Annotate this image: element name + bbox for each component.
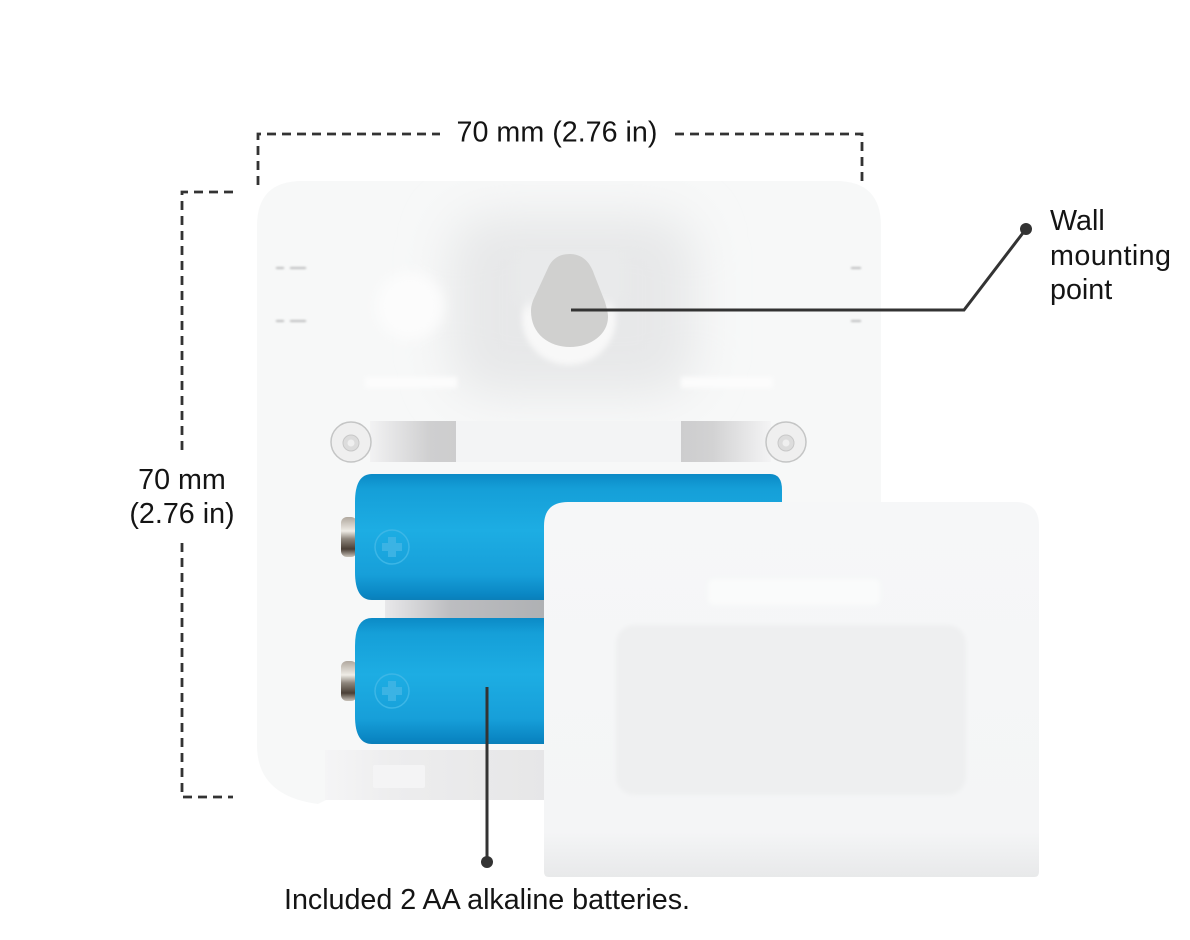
clip marks — [276, 268, 861, 321]
icon: screw left — [331, 422, 371, 462]
wall mount leader line — [571, 223, 1032, 310]
icon: screw right — [766, 422, 806, 462]
wall mount label: point — [1050, 274, 1112, 306]
strip left — [370, 421, 456, 462]
battery cover — [544, 502, 1039, 877]
cover label recess — [616, 625, 966, 795]
recessed shading around mount — [450, 215, 695, 395]
battery bottom — [341, 618, 550, 744]
icon: plus mark — [375, 674, 409, 708]
height label: (2.76 in) — [129, 498, 235, 530]
height dimension bracket — [182, 192, 233, 797]
wall mount label: Wall — [1050, 205, 1105, 237]
cover latch — [708, 579, 880, 605]
wall mount label: mounting — [1050, 240, 1171, 272]
embossed slot right — [682, 378, 702, 386]
icon: wall mounting keyhole — [515, 250, 625, 365]
width dimension bracket — [258, 134, 862, 185]
compartment tab — [417, 765, 425, 788]
battery leader line — [481, 687, 493, 868]
gap between batteries — [385, 600, 544, 618]
height label: 70 mm — [138, 464, 226, 496]
width label: 70 mm (2.76 in) — [457, 116, 657, 148]
device body — [257, 181, 881, 804]
compartment floor — [368, 750, 544, 800]
battery top — [341, 474, 782, 600]
battery label: Included 2 AA alkaline batteries. — [284, 884, 690, 916]
icon: plus mark — [375, 530, 409, 564]
strip middle — [456, 421, 681, 462]
embossed slot left — [442, 380, 456, 384]
strip right — [681, 421, 771, 462]
icon: embossed sun logo — [430, 293, 437, 319]
